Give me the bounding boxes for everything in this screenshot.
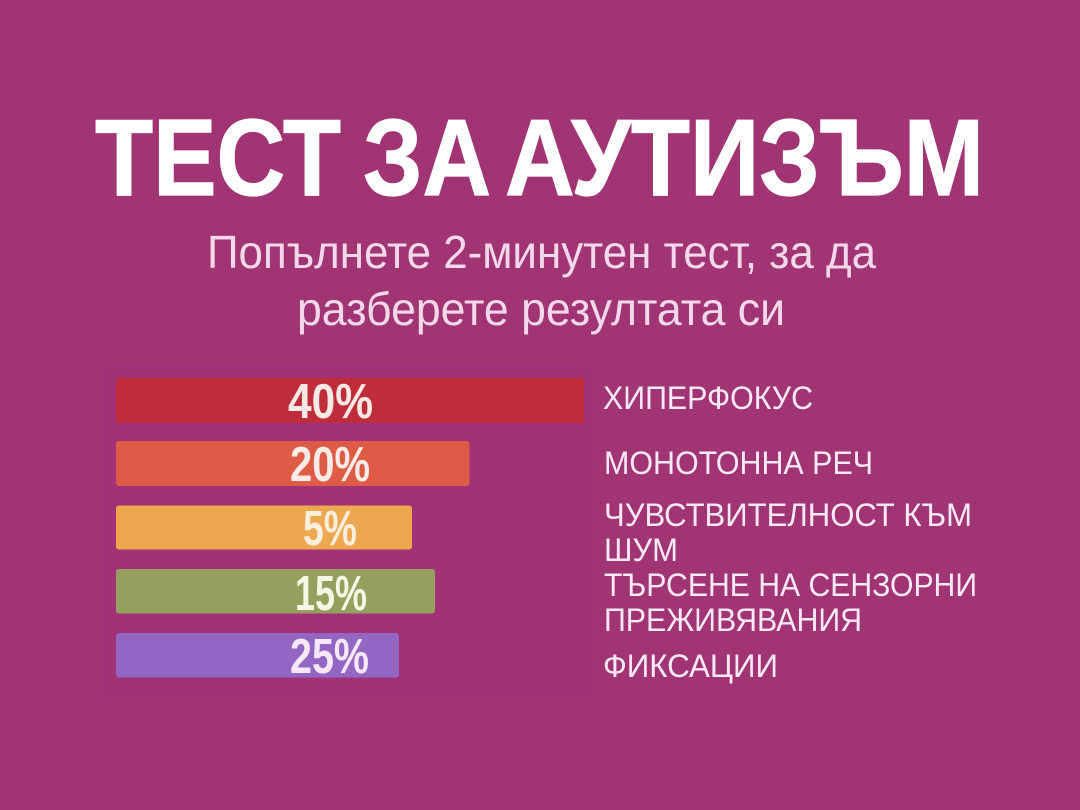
label: fixations: ФИКСАЦИИ: [603, 648, 778, 684]
subtitle: [207, 226, 876, 335]
label: sensory seeking: [604, 567, 977, 638]
title: ТЕСТ: [95, 97, 341, 219]
subtitle: разберете резултата си: [297, 283, 785, 335]
row: 5%: 5%: [303, 502, 357, 556]
subtitle: Попълнете 2-минутен тест, за да: [207, 226, 876, 278]
row: 20%: 20%: [290, 438, 370, 492]
title: [95, 97, 984, 219]
row: 40%: 40%: [288, 375, 373, 429]
label: hyperfocus: ХИПЕРФОКУС: [603, 380, 813, 416]
bar chart: [116, 375, 584, 684]
label: sensory seeking: ТЪРСЕНЕ НА СЕНЗОРНИ: [604, 567, 977, 603]
label: sensory seeking: ПРЕЖИВЯВАНИЯ: [604, 602, 862, 638]
label: noise sensitivity: [604, 497, 972, 568]
title: ЗА: [363, 97, 491, 219]
title: АУТИЗЪМ: [505, 97, 984, 219]
row: 15%: [116, 567, 435, 621]
label: monotone speech: МОНОТОННА РЕЧ: [604, 445, 873, 481]
row: 5%: [116, 502, 412, 556]
row: 20%: [116, 438, 470, 492]
row: 40%: [116, 375, 584, 429]
label: noise sensitivity: ШУМ: [604, 532, 678, 568]
row: 25%: [116, 630, 399, 684]
row: 25%: 25%: [290, 630, 369, 684]
row: 15%: 15%: [295, 567, 367, 621]
label: noise sensitivity: ЧУВСТВИТЕЛНОСТ КЪМ: [604, 497, 972, 533]
